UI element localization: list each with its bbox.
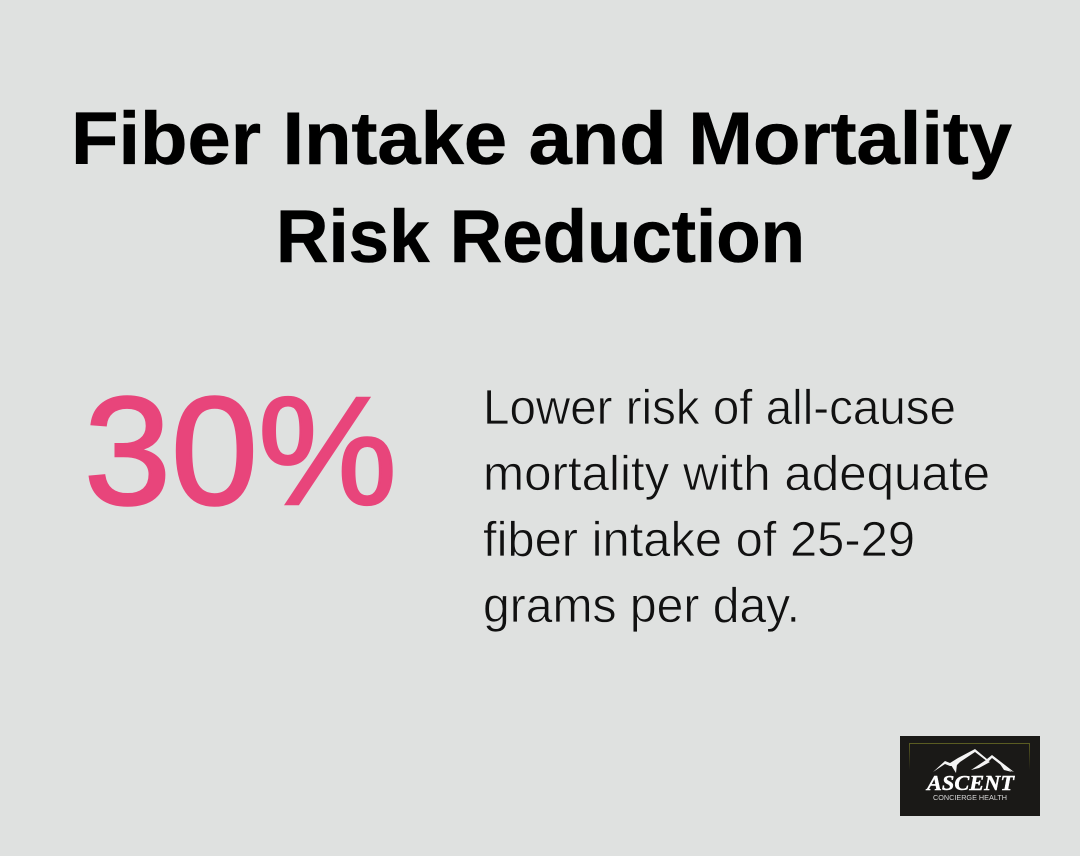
big statistic: 30%: 30% [84, 365, 397, 537]
icon: mountains [933, 749, 1014, 773]
title: Fiber Intake and Mortality [71, 97, 1012, 180]
description text: fiber intake of 25-29 [483, 513, 915, 567]
description text: mortality with adequate [483, 447, 990, 501]
logo wordmark: ASCENT [925, 771, 1015, 795]
description text [483, 381, 990, 633]
description text: Lower risk of all-cause [483, 381, 956, 435]
logo: Ascent Concierge Health [900, 736, 1040, 816]
title: Risk Reduction [276, 195, 805, 278]
description text: grams per day. [483, 579, 800, 633]
logo subtitle: CONCIERGE HEALTH [933, 795, 1007, 802]
title [71, 97, 1012, 278]
